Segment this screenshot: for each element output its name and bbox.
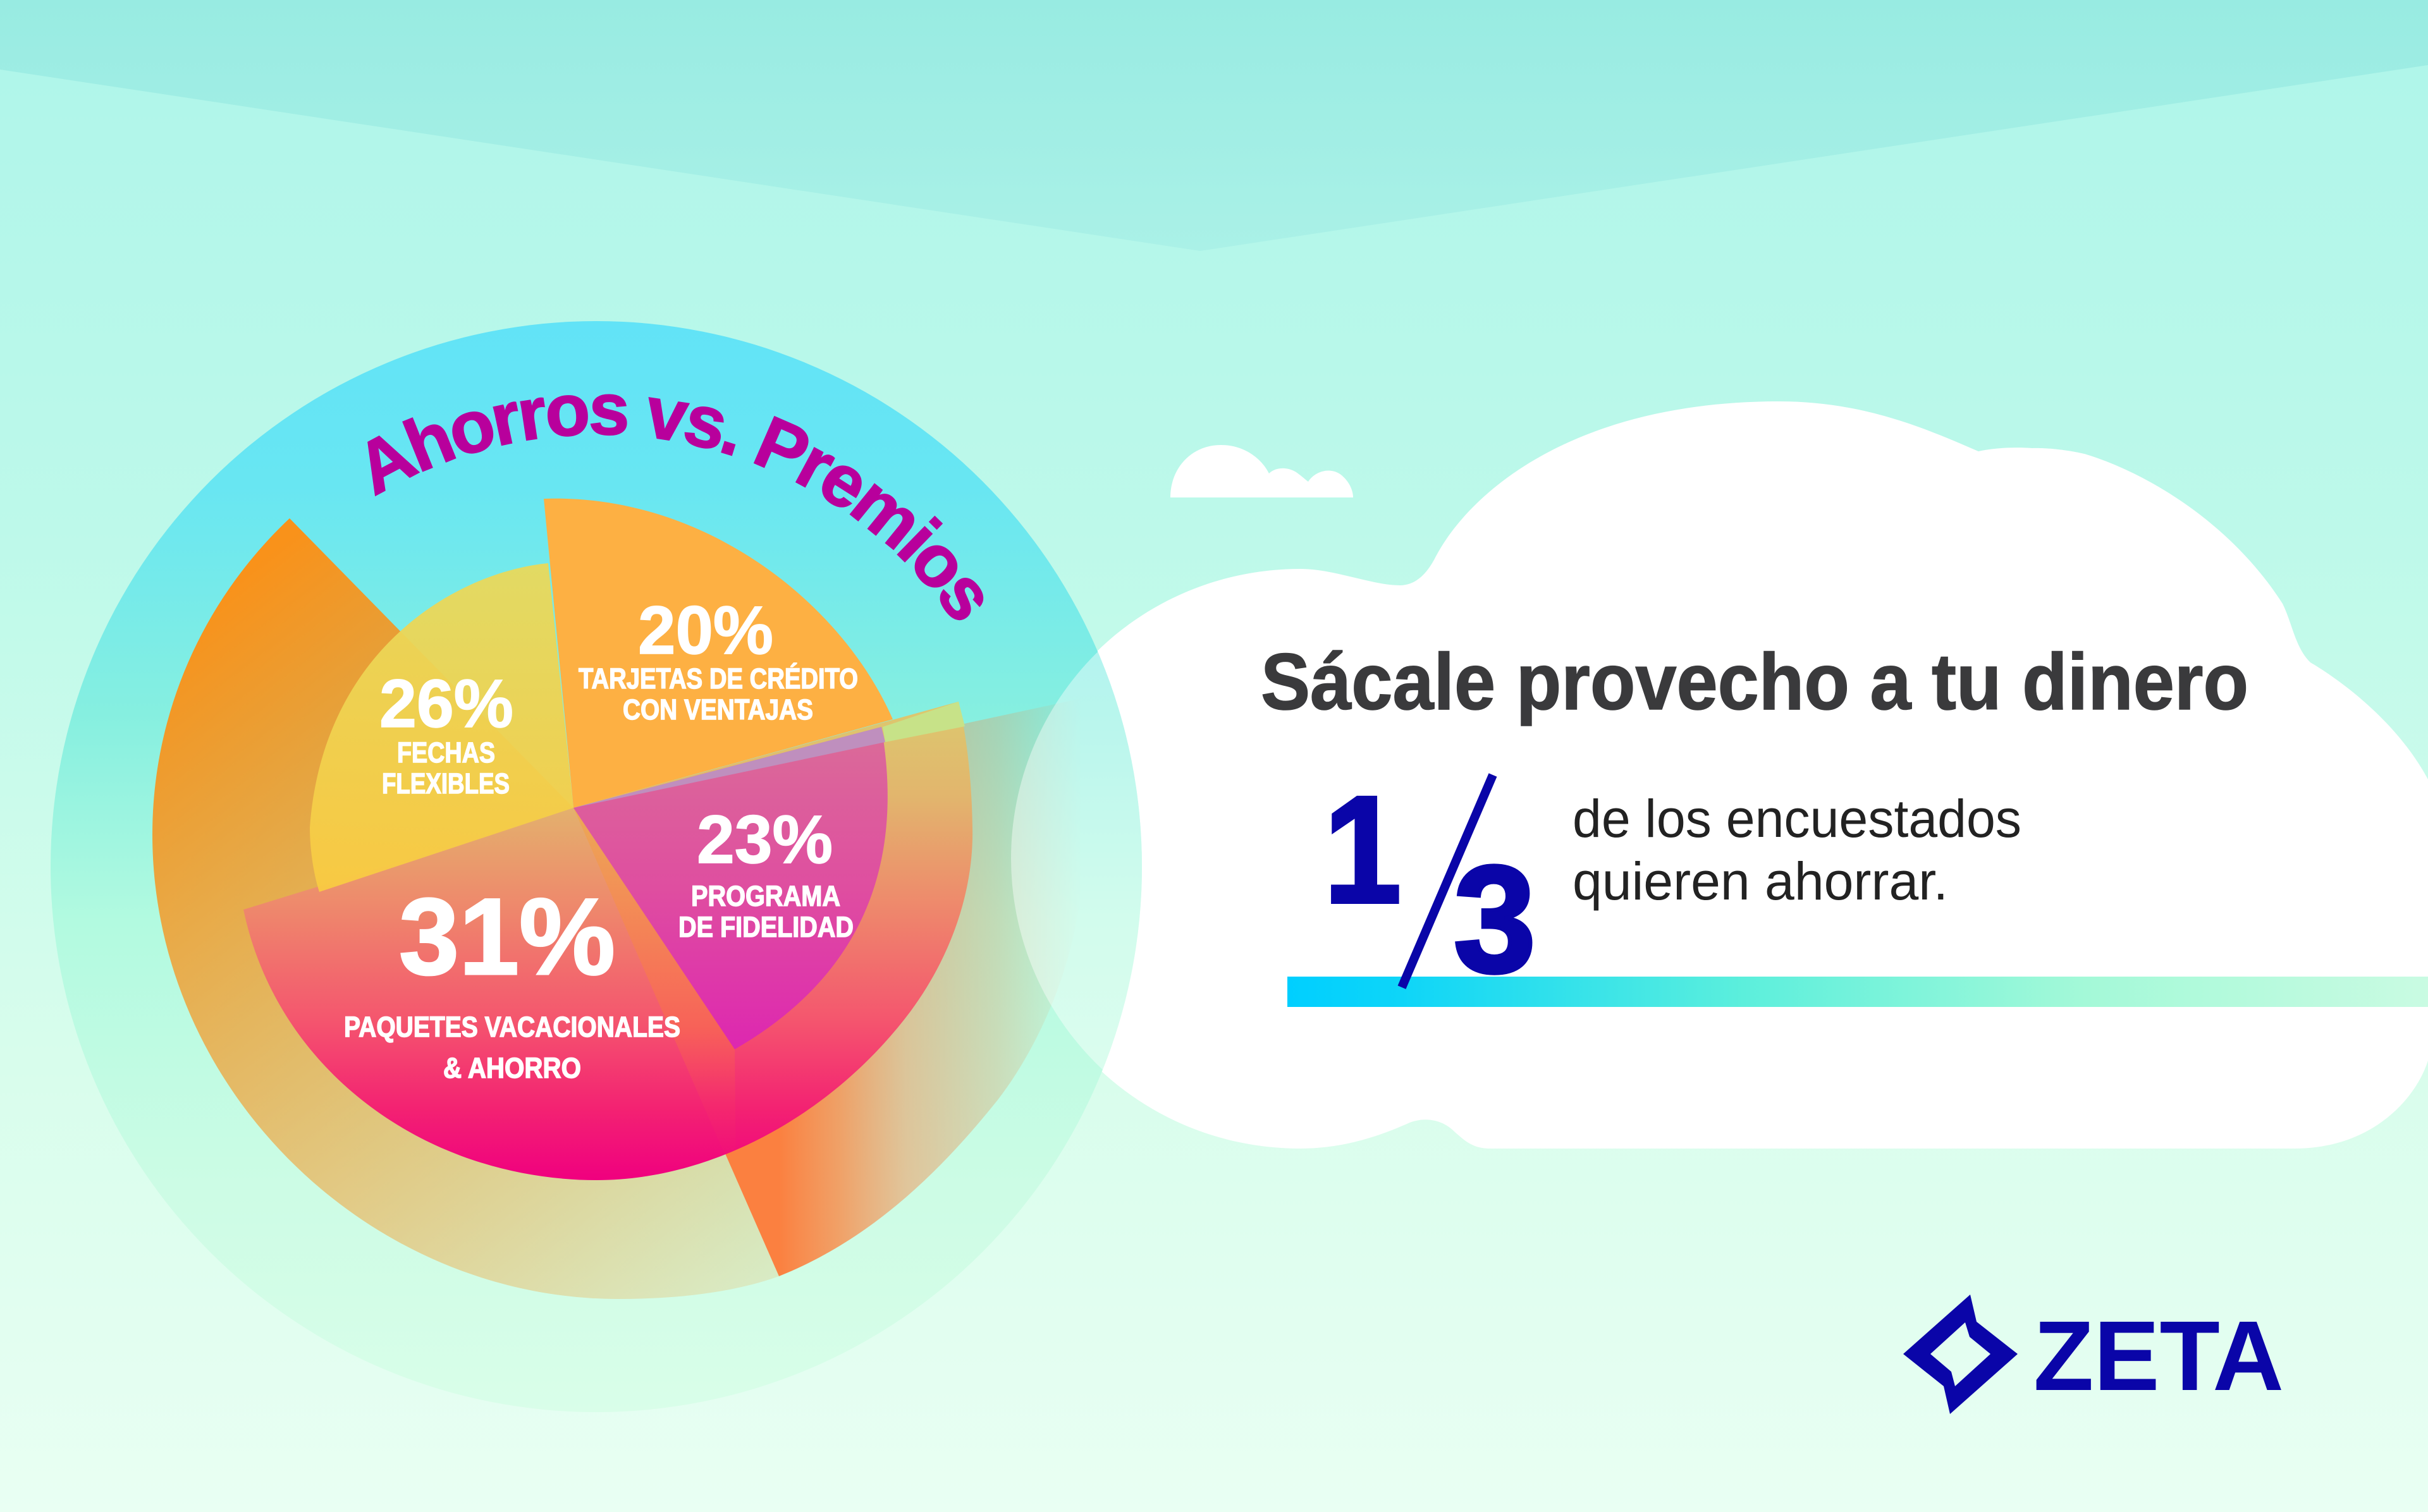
wedge tint inside the pink slice bbox=[573, 808, 736, 1180]
small cloud bbox=[1170, 445, 1353, 497]
pie chart wedges bbox=[152, 499, 1081, 1299]
label: 20% tarjetas: 20% bbox=[638, 592, 773, 668]
body text: quieren ahorrar. bbox=[1573, 851, 1948, 911]
top sky band bbox=[0, 0, 2428, 251]
heading: Sácale provecho a tu dinero bbox=[1261, 637, 2248, 726]
label: 20% tarjetas: CON VENTAJAS bbox=[623, 693, 813, 726]
fraction one third bbox=[1324, 765, 1536, 1004]
wedge: 23% purple bbox=[573, 727, 888, 1049]
label: 26% fechas flexibles bbox=[379, 665, 513, 800]
label: 23% programa de fidelidad: DE FIDELIDAD bbox=[678, 911, 854, 943]
large white cloud bbox=[1010, 401, 2428, 1149]
logo wordmark: ZETA bbox=[2033, 1301, 2284, 1411]
logo: ZETA bbox=[1903, 1295, 2284, 1414]
wedge: 26% yellow bbox=[310, 563, 573, 892]
wedge: right orange fade bbox=[573, 698, 1081, 1276]
fraction one third: 3 bbox=[1454, 834, 1536, 1004]
wedge: 20% light orange bbox=[544, 499, 893, 808]
wedge: left orange fade bbox=[152, 518, 779, 1299]
translucent lens between circle and cloud bbox=[1011, 652, 1142, 1070]
label: 31% paquetes vacacionales: & AHORRO bbox=[443, 1052, 581, 1084]
body text bbox=[1573, 789, 2021, 911]
wedge: 31% pink bbox=[243, 702, 972, 1180]
label: 31% paquetes vacacionales: PAQUETES VACACIONALES bbox=[344, 1011, 680, 1043]
logo icon: diamond star bbox=[1903, 1295, 2018, 1414]
outer pie circle bbox=[51, 321, 1142, 1412]
sliver: lilac above the wedge line bbox=[573, 727, 885, 808]
label: 23% programa de fidelidad bbox=[678, 801, 854, 943]
label: 23% programa de fidelidad: PROGRAMA bbox=[691, 880, 840, 912]
curved title: Ahorros vs. Premios: Ahorros vs. Premios bbox=[367, 394, 984, 621]
fraction one third: 1 bbox=[1324, 765, 1401, 934]
label: 20% tarjetas bbox=[579, 592, 858, 726]
label: 26% fechas flexibles: 26% bbox=[379, 665, 513, 741]
label: 20% tarjetas: TARJETAS DE CRÉDITO bbox=[579, 662, 858, 695]
label: 26% fechas flexibles: FECHAS bbox=[397, 736, 495, 769]
gradient bar bbox=[1287, 977, 2428, 1007]
body text: de los encuestados bbox=[1573, 789, 2021, 848]
label: 31% paquetes vacacionales: 31% bbox=[399, 876, 615, 997]
label: 26% fechas flexibles: FLEXIBLES bbox=[382, 767, 510, 800]
sliver: yellow-green tip bbox=[883, 702, 965, 742]
label: 31% paquetes vacacionales bbox=[344, 876, 680, 1084]
label: 23% programa de fidelidad: 23% bbox=[697, 801, 833, 877]
